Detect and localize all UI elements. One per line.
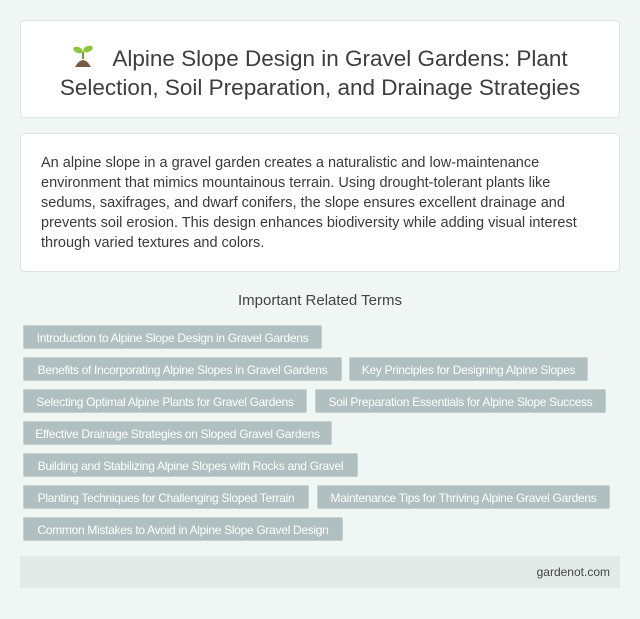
tag (315, 389, 606, 413)
title box (20, 20, 620, 118)
icon: seedling (73, 46, 93, 67)
footer (20, 556, 620, 588)
description box (20, 133, 620, 272)
tag (23, 389, 307, 413)
tag: Building and Stabilizing Alpine Slopes with Rocks and Gravel (38, 459, 343, 473)
tag: Planting Techniques for Challenging Sloped Terrain (38, 491, 294, 505)
tag (23, 517, 343, 541)
tag (23, 485, 309, 509)
tag: Effective Drainage Strategies on Sloped Gravel Gardens (35, 427, 320, 441)
heading: related terms: Important Related Terms (238, 292, 402, 309)
tag (349, 357, 588, 381)
tag: Selecting Optimal Alpine Plants for Gravel Gardens (36, 395, 294, 409)
tag (23, 325, 322, 349)
tag (23, 453, 358, 477)
tag: Introduction to Alpine Slope Design in Gravel Gardens (37, 331, 308, 345)
tag (317, 485, 610, 509)
footer text: gardenot.com (537, 565, 610, 579)
description text: An alpine slope in a gravel garden creates a naturalistic and low-maintenance environment that mimics mountainous terrain. Using drought-tolerant plants like sedums, saxifrages, and dwarf conifers, the slope ensures excellent drainage and prevents soil erosion. This design enhances biodiversity while adding visual interest through varied textures and colors. (41, 155, 577, 251)
tag (23, 421, 332, 445)
tag: Benefits of Incorporating Alpine Slopes in Gravel Gardens (38, 363, 327, 377)
title: Alpine Slope Design in Gravel Gardens: Plant Selection, Soil Preparation, and Drainage Strategies (60, 46, 580, 100)
tag: Soil Preparation Essentials for Alpine Slope Success (329, 395, 592, 409)
tag: Common Mistakes to Avoid in Alpine Slope Gravel Design (37, 523, 329, 537)
tag (23, 357, 342, 381)
tag: Key Principles for Designing Alpine Slopes (362, 363, 575, 377)
tag: Maintenance Tips for Thriving Alpine Gravel Gardens (331, 491, 596, 505)
